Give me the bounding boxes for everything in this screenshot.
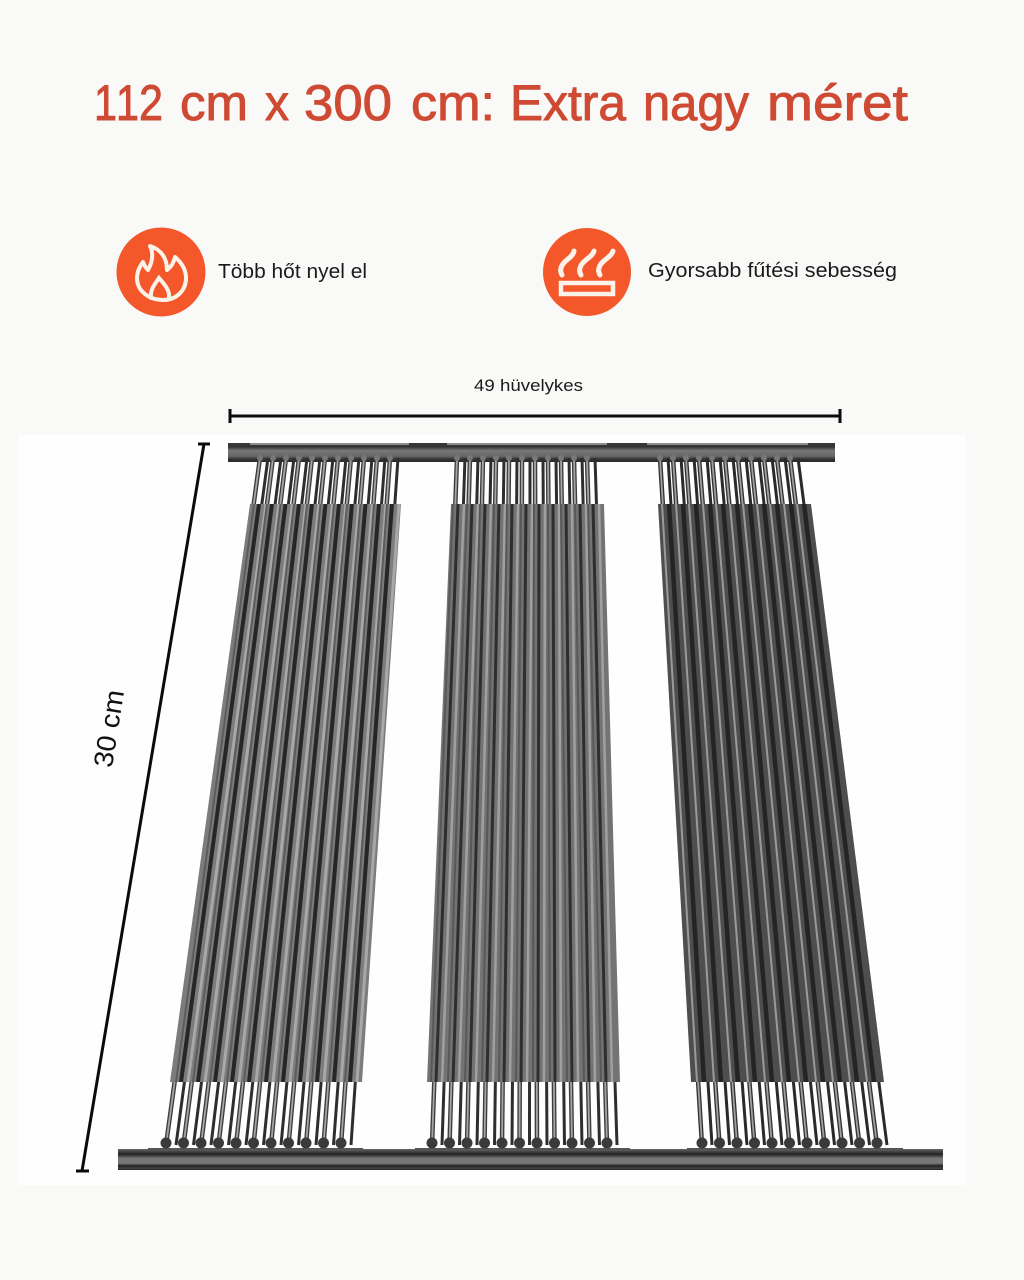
label: Több hőt nyel el: Több hőt nyel el [218,261,367,283]
title: x [265,75,289,131]
bottom header pipe [118,1148,943,1170]
icon: flame [116,228,206,316]
left mat [160,504,410,1082]
left mat tubes [160,455,398,1148]
length dimension [76,444,210,1171]
title: cm: [411,75,495,131]
length arrow [76,444,210,1171]
title: 1 [94,75,117,131]
title [94,75,908,131]
length label: 30 cm [88,688,130,769]
title: méret [767,75,908,131]
top header pipe [228,443,835,462]
title: 1 [116,75,139,131]
title: nagy [643,75,749,131]
width dimension [230,376,840,423]
title: 2 [139,75,163,131]
middle mat [420,504,630,1082]
right mat [650,504,890,1082]
title: 300 [304,75,392,131]
white product image background [18,435,966,1185]
title: Extra [510,75,626,131]
middle mat tubes [426,455,617,1148]
feature: faster heating [543,228,897,316]
solar heater panel product [118,443,943,1170]
feature: absorbs more heat [116,228,367,316]
width arrow [230,409,840,423]
title: cm [180,75,248,131]
icon: heat rising from a surface [543,228,631,316]
label: Gyorsabb fűtési sebesség: Gyorsabb fűtési sebesség [648,260,897,282]
width label: 49 hüvelykes [474,376,583,395]
right mat tubes [657,455,887,1148]
